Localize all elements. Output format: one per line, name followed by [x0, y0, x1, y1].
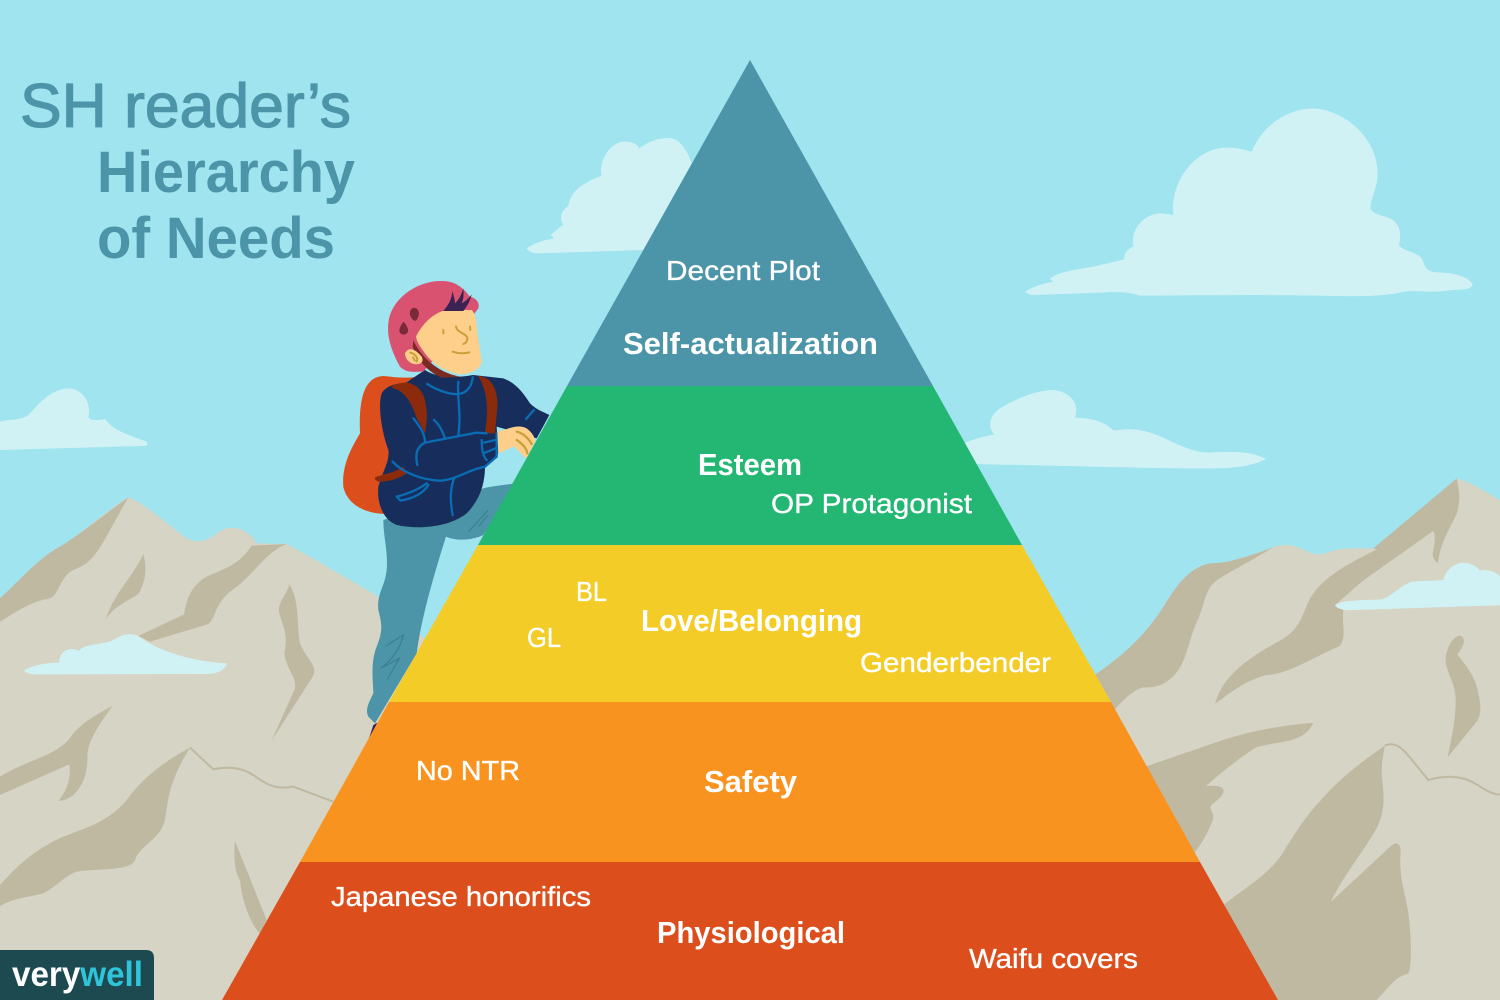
labels: safety: Safety [704, 764, 798, 799]
labels: esteem: Esteem [698, 447, 802, 482]
backpack straps [375, 376, 498, 482]
climber illustration [343, 281, 549, 739]
legs [367, 483, 517, 723]
cloud: behind pyramid top [527, 138, 692, 253]
labels: physiological: Japanese honorifics [331, 881, 591, 912]
logo: verywell: verywell [12, 955, 143, 994]
logo: verywell [0, 950, 154, 1000]
labels: physiological: Waifu covers [969, 943, 1138, 974]
labels: esteem: OP Protagonist [771, 488, 972, 519]
labels: love/belonging: BL [576, 576, 607, 607]
title: Hierarchy [97, 140, 355, 205]
right mountains [1000, 478, 1500, 1000]
leg scribbles [381, 510, 488, 679]
cloud: far left [0, 388, 147, 450]
helmet strap [413, 340, 462, 378]
jacket lines [393, 377, 534, 515]
labels: physiological [331, 881, 1138, 974]
labels: esteem [698, 447, 972, 519]
tier: physiological [222, 862, 1278, 1000]
labels: love/belonging: Love/Belonging [641, 603, 862, 638]
title [20, 72, 355, 271]
helmet [388, 281, 479, 372]
labels: self-actualization: Self-actualization [623, 326, 878, 361]
backpack [343, 373, 427, 514]
cloud: right of pyramid [960, 390, 1266, 468]
tier: esteem [478, 386, 1022, 545]
facial features [443, 327, 470, 353]
labels: safety [416, 755, 798, 799]
jacket [378, 370, 549, 527]
labels: safety: No NTR [416, 755, 520, 786]
labels: love/belonging: Genderbender [860, 647, 1051, 678]
labels: self-actualization: Decent Plot [666, 255, 820, 286]
cloud: upper right [1025, 108, 1473, 296]
tier: love/belonging [389, 545, 1111, 702]
hand [497, 427, 535, 458]
face [416, 310, 482, 374]
title: of Needs [97, 206, 335, 271]
hair [443, 288, 472, 311]
title: SH reader’s [20, 72, 351, 141]
labels: love/belonging: GL [527, 622, 561, 653]
left mountains [0, 497, 433, 1000]
labels: love/belonging [527, 576, 1051, 678]
ear [405, 349, 423, 364]
shoe [369, 723, 377, 739]
pyramid [222, 60, 1278, 1000]
tier: safety [300, 702, 1200, 862]
tier: self-actualization [567, 60, 933, 386]
labels: physiological: Physiological [657, 915, 845, 950]
labels: self-actualization [623, 255, 878, 361]
helmet vents [399, 308, 419, 335]
